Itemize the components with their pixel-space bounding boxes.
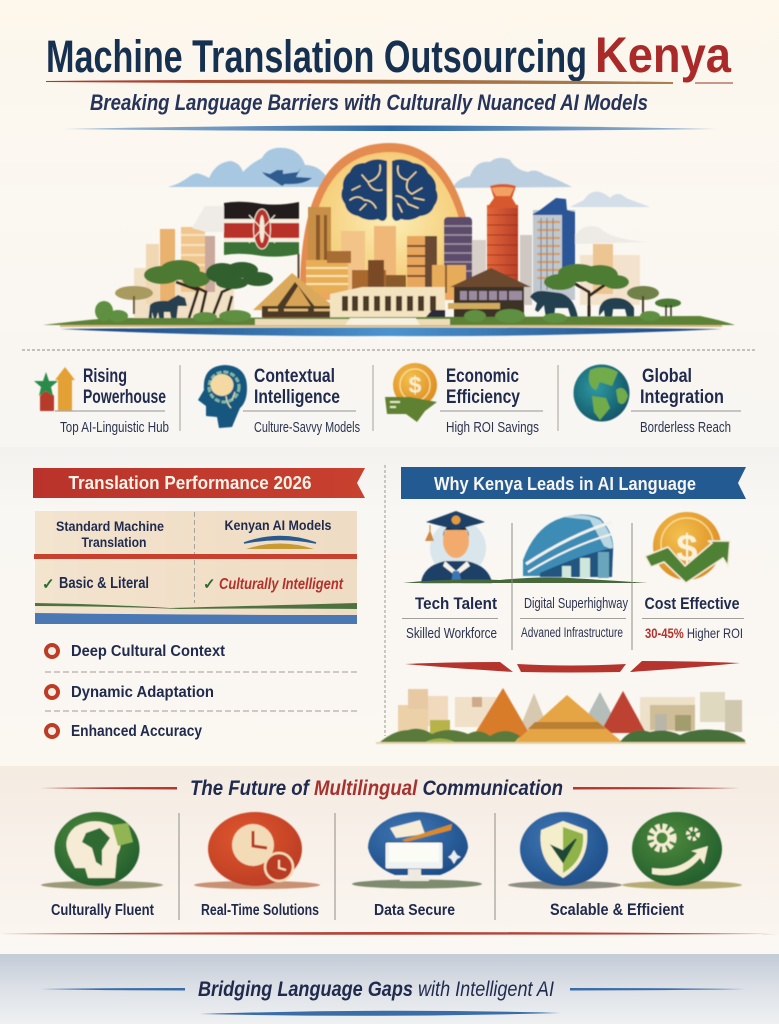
label: Scalable & Efficient — [550, 901, 684, 919]
feature: rising powerhouse: Powerhouse — [83, 387, 166, 408]
comparison table — [34, 511, 357, 624]
heading: The Future of Multilingual Communication — [190, 777, 563, 800]
ribbon heading: Why Kenya Leads in AI Language — [434, 474, 696, 494]
red tower — [487, 184, 518, 300]
pagoda — [448, 268, 531, 322]
feature: economic efficiency: High ROI Savings — [446, 420, 539, 436]
icon: data secure — [352, 812, 482, 888]
comparison table: ✓ — [203, 576, 216, 593]
icon: coin and hand — [385, 363, 437, 422]
icon: coin with growth arrow: $ — [676, 528, 698, 570]
list: benefits: Dynamic Adaptation — [71, 684, 214, 701]
label: Culturally Fluent — [51, 902, 154, 919]
list: benefits — [45, 643, 360, 740]
comparison table: Basic & Literal — [59, 575, 149, 592]
brain — [341, 159, 438, 221]
list: benefits: Deep Cultural Context — [71, 643, 226, 660]
subtitle rule — [64, 126, 716, 131]
center buildings — [306, 207, 472, 301]
column: digital superhighway — [520, 595, 628, 640]
feature: economic efficiency — [385, 363, 543, 436]
long building — [330, 287, 445, 324]
feature: global integration: Global — [642, 366, 692, 387]
icon: digital superhighway — [523, 514, 613, 578]
icon: real-time solutions — [194, 812, 320, 889]
icon: scalable gears — [622, 812, 742, 889]
comparison table: Standard Machine — [56, 518, 164, 534]
footer band: Bridging Language Gaps with Intelligent AI — [198, 978, 554, 1001]
skyline with pyramids — [376, 688, 746, 744]
water — [60, 328, 722, 336]
column: digital superhighway: Advaned Infrastructure — [521, 625, 623, 640]
column: tech talent: Skilled Workforce — [406, 626, 497, 642]
feature row — [34, 363, 741, 436]
column: cost effective: Cost Effective — [644, 595, 740, 613]
feature: economic efficiency: Economic — [446, 366, 519, 387]
feature: global integration: Integration — [640, 387, 724, 408]
feature: rising powerhouse: Top AI-Linguistic Hub — [60, 420, 169, 436]
label: Data Secure — [374, 902, 455, 919]
subtitle: Breaking Language Barriers with Culturally Nuanced AI Models — [90, 90, 648, 115]
comparison table: ✓ — [42, 576, 55, 593]
comparison table: Translation — [82, 534, 146, 550]
icon: star and arrows — [34, 367, 75, 411]
feature: contextual intelligence: Contextual — [254, 366, 335, 387]
horse silhouette — [148, 295, 187, 323]
column: tech talent: Tech Talent — [415, 595, 497, 613]
elephants and savanna trees — [530, 264, 681, 318]
icon: head with brain — [198, 365, 247, 428]
hero illustration: Nairobi skyline with brain and flag — [43, 143, 735, 336]
feature: global integration — [574, 364, 741, 436]
comparison table: Culturally Intelligent — [219, 576, 344, 593]
clouds — [168, 148, 650, 244]
list: benefits: Enhanced Accuracy — [71, 723, 202, 740]
feature: contextual intelligence: Intelligence — [254, 387, 340, 408]
ribbon heading — [401, 467, 746, 499]
thatched hut — [253, 273, 346, 325]
icon: scalable shield — [508, 812, 622, 889]
trees left — [115, 260, 273, 318]
column: cost effective: 30-45% Higher ROI — [645, 625, 743, 641]
feature: contextual intelligence: Culture-Savvy Models — [254, 420, 360, 436]
column: cost effective — [642, 595, 744, 641]
icon: coin with growth arrow — [645, 512, 730, 583]
title: Machine Translation Outsourcing — [46, 31, 587, 82]
panel divider: dashed — [384, 465, 386, 736]
footer band — [40, 978, 745, 1016]
icon: coin and hand: $ — [409, 372, 422, 398]
dome — [300, 143, 478, 300]
feature: global integration: Borderless Reach — [640, 420, 731, 436]
comparison table: Kenyan AI Models — [224, 517, 332, 533]
plane — [262, 168, 312, 186]
feature: contextual intelligence — [198, 365, 360, 436]
blue tower — [533, 198, 575, 300]
feature: economic efficiency: Efficiency — [446, 387, 520, 408]
label: Real-Time Solutions — [201, 902, 319, 919]
panel: translation performance — [33, 468, 365, 740]
panel: why Kenya leads — [376, 467, 746, 744]
title: Kenya — [595, 27, 732, 83]
pale background buildings — [134, 206, 640, 318]
ground — [43, 301, 735, 327]
Kenya flag — [224, 202, 300, 280]
column: digital superhighway: Digital Superhighway — [524, 595, 628, 612]
feature: rising powerhouse — [34, 366, 169, 436]
column: tech talent — [402, 595, 498, 642]
feature: rising powerhouse: Rising — [83, 366, 127, 387]
icon: culturally fluent — [41, 812, 163, 889]
panel: future of multilingual communication — [0, 777, 779, 935]
ribbon heading: Translation Performance 2026 — [68, 473, 312, 493]
icon: globe — [574, 364, 630, 422]
icon: graduate — [421, 511, 492, 583]
ground strip — [403, 577, 648, 583]
ribbon heading — [33, 468, 365, 498]
divider: dashed — [22, 349, 757, 351]
section rule — [0, 932, 779, 935]
red swooshes — [405, 661, 740, 672]
